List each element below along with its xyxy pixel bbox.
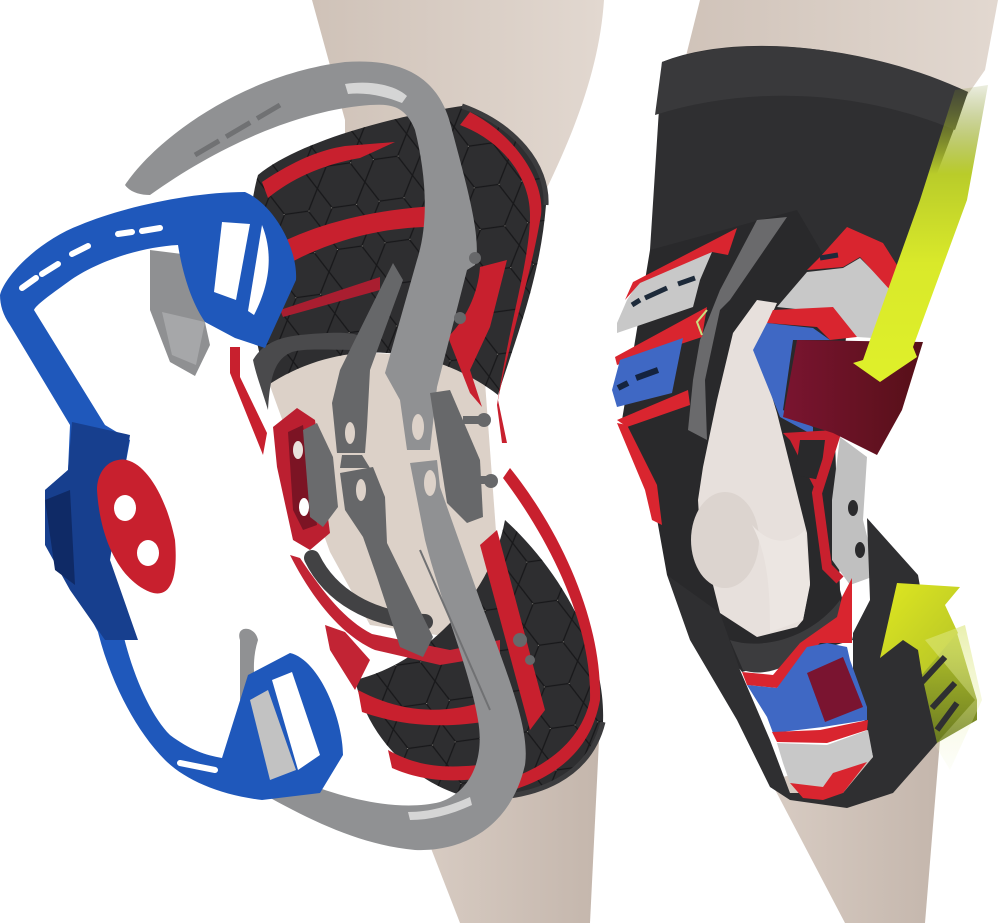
lower dark roll <box>312 558 425 622</box>
blue frame <box>0 192 343 800</box>
strap upper <box>783 340 923 455</box>
blue hinge plate <box>45 422 138 640</box>
upper right panel <box>777 227 902 338</box>
knee bone <box>691 300 810 637</box>
upper liner with hex pattern <box>249 106 546 410</box>
lower cup <box>742 578 873 800</box>
arrow upper <box>853 85 988 382</box>
left leg lower <box>420 720 600 923</box>
grey stirrup behind blue <box>150 250 210 376</box>
right leg top <box>670 0 998 120</box>
upper right red and blue <box>753 307 857 493</box>
calf sleeve <box>667 518 940 808</box>
left leg upper <box>312 0 604 300</box>
lower liner with hex pattern <box>355 520 603 798</box>
red oval pad <box>273 408 338 550</box>
left panel lower red <box>617 390 690 525</box>
stitched inner strip <box>688 217 787 440</box>
strap lower <box>807 657 863 722</box>
thigh sleeve <box>650 46 968 500</box>
right hinge <box>817 433 873 585</box>
inner cutaway <box>622 210 853 672</box>
arrow lower <box>880 583 982 770</box>
lower red frame <box>290 468 600 795</box>
left panel red band <box>615 307 707 365</box>
upper red frame <box>230 112 541 455</box>
left panel blue <box>612 338 683 407</box>
grey frame upper <box>125 61 477 450</box>
outer dark rim <box>462 106 603 798</box>
dark grey hinge plates <box>332 263 433 657</box>
red blue pad <box>97 460 176 593</box>
medial plate and screws <box>430 252 535 665</box>
grey frame lower <box>239 460 526 850</box>
right leg bottom <box>770 740 940 923</box>
lower band <box>730 600 845 673</box>
left knee <box>265 353 497 640</box>
upper left panel <box>617 228 737 333</box>
